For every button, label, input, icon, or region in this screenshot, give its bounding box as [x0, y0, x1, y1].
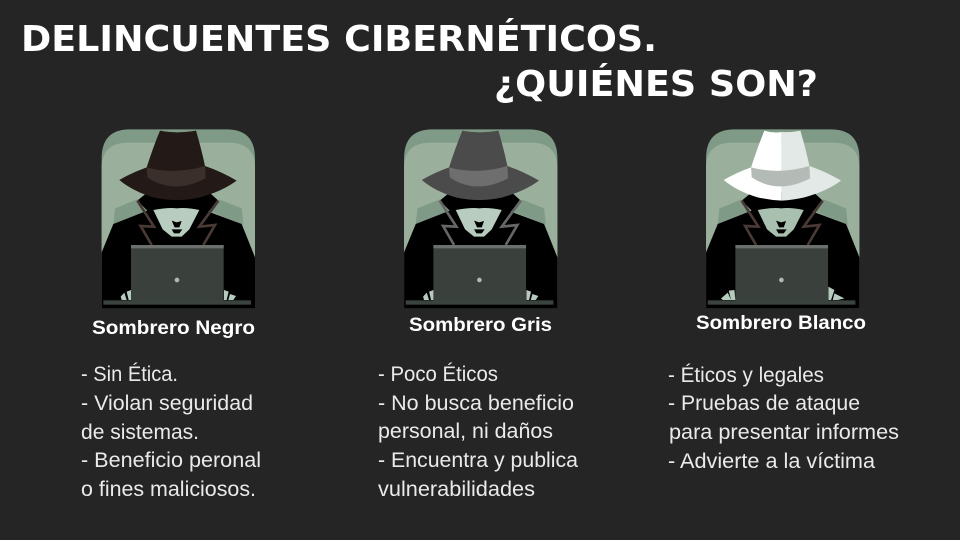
text block: description [378, 363, 578, 501]
text block: description: personal, ni daños [378, 420, 553, 443]
text block: description: para presentar informes [669, 421, 899, 444]
panel: sombrero negro [81, 129, 261, 501]
text block: description: - No busca beneficio [378, 392, 574, 415]
title [21, 18, 818, 105]
panel: sombrero blanco [668, 129, 899, 473]
icon: white hat hacker [706, 129, 859, 308]
text block: description [81, 363, 261, 501]
text block: description: - Violan seguridad [81, 392, 253, 415]
label: Sombrero Gris [409, 314, 552, 336]
icon: grey hat hacker [404, 129, 557, 308]
panel: sombrero gris [378, 129, 578, 501]
text block: description: - Pruebas de ataque [668, 392, 860, 415]
text block: description: - Poco Éticos [378, 363, 498, 386]
label: Sombrero Negro [92, 317, 255, 339]
text block: description: de sistemas. [81, 421, 199, 444]
text block: description [668, 364, 899, 473]
title: DELINCUENTES CIBERNÉTICOS. [21, 18, 657, 60]
text block: description: - Éticos y legales [668, 364, 824, 387]
text block: description: vulnerabilidades [378, 478, 535, 501]
label: Sombrero Blanco [696, 312, 866, 334]
text block: description: - Encuentra y publica [378, 449, 578, 472]
text block: description: o fines maliciosos. [81, 478, 256, 501]
text block: description: - Advierte a la víctima [668, 450, 875, 473]
icon: black hat hacker [102, 129, 255, 308]
title: ¿QUIÉNES SON? [494, 63, 818, 105]
text block: description: - Sin Ética. [81, 363, 178, 386]
text block: description: - Beneficio peronal [81, 449, 261, 472]
